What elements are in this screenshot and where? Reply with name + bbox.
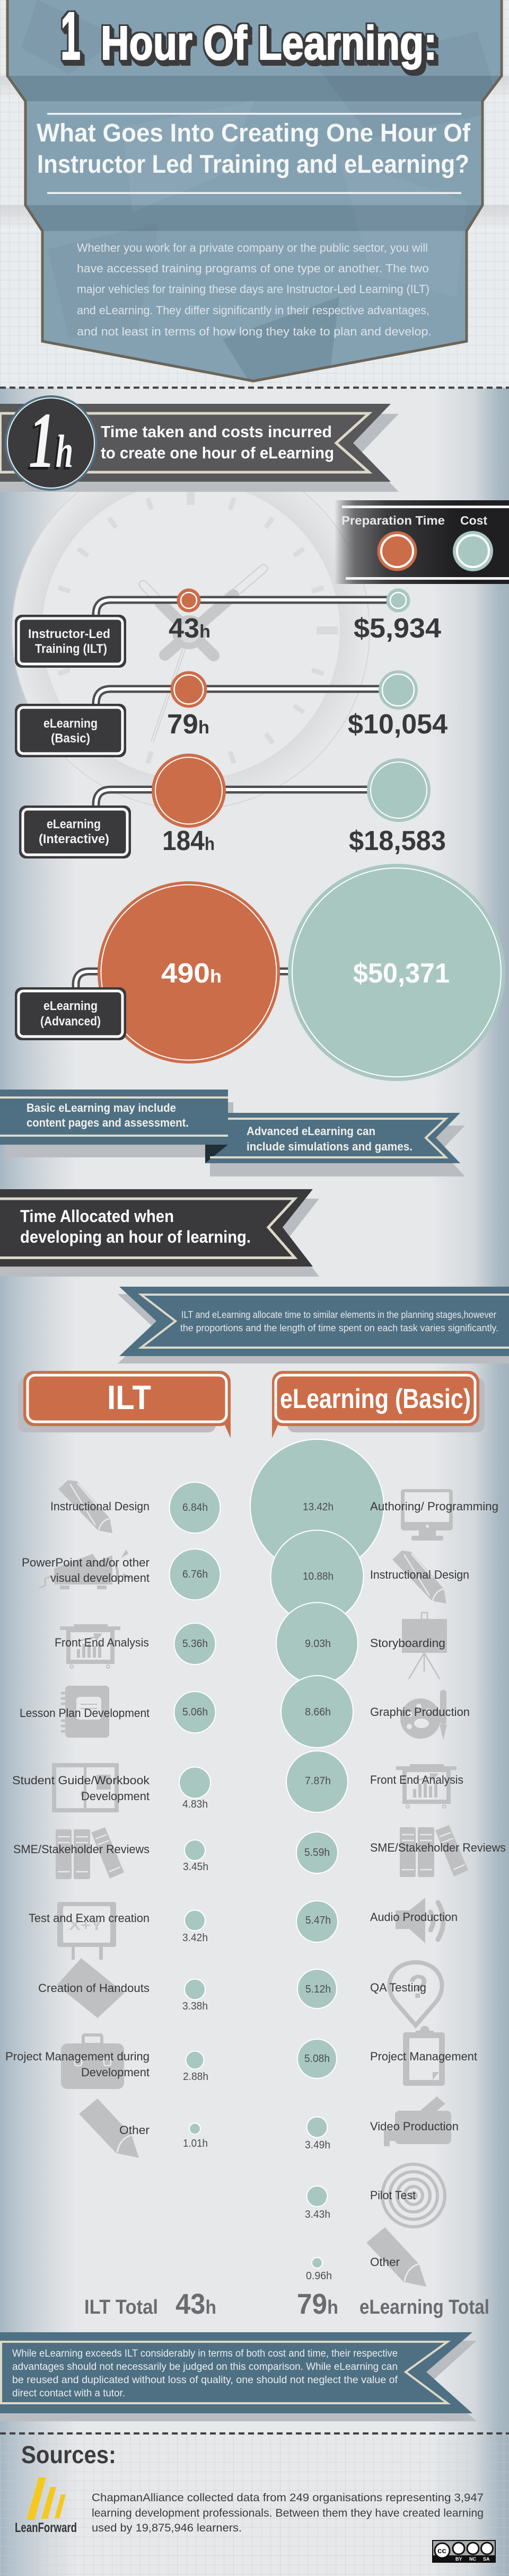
icon: notebook (62, 1686, 109, 1738)
intro paragraph: and eLearning. They differ significantly in their respective advantages, (77, 304, 429, 317)
ILT task labels: Instructional Design (50, 1500, 150, 1513)
callout: allocation note: the proportions and the length of time spent on each task varies significantly. (180, 1323, 498, 1333)
ILT task labels: Student Guide/Workbook (12, 1774, 150, 1787)
badge: creative commons: BY (455, 2556, 462, 2562)
ILT hour values: 2.88h (183, 2071, 208, 2083)
icon: briefcase (61, 2035, 124, 2089)
icon: monitor (401, 1489, 453, 1541)
row: eLearning Advanced (15, 864, 505, 1081)
logo: LeanForward (15, 2477, 77, 2535)
totals: 79h (297, 2288, 338, 2320)
eLearning task labels: QA Testing (370, 1981, 426, 1994)
callout: conclusion: be reused and duplicated without loss of quality, one should not neglect the value of (12, 2375, 398, 2386)
logo: LeanForward: LeanForward (15, 2520, 77, 2535)
badge: creative commons: SA (483, 2556, 490, 2562)
ILT task labels: Creation of Handouts (38, 1981, 150, 1995)
eLearning hour values: 0.96h (306, 2270, 332, 2282)
ILT hour values: 5.36h (182, 1638, 208, 1650)
icon: pen (392, 1551, 446, 1604)
icon: pencil (79, 2099, 139, 2158)
row: eLearning Advanced: 490h (161, 958, 222, 989)
row: eLearning Interactive: 184h (162, 826, 215, 856)
eLearning hour values: 7.87h (305, 1775, 331, 1787)
totals: 43h (175, 2288, 216, 2320)
section ribbon: time and costs: Time taken and costs incurred (101, 422, 332, 441)
callout: conclusion (0, 2332, 477, 2421)
ILT hour values: 3.45h (183, 1861, 208, 1873)
ILT task labels: visual development (50, 1571, 150, 1584)
eLearning hour values: 5.47h (305, 1915, 331, 1926)
ILT task labels: PowerPoint and/or other (22, 1556, 150, 1569)
row: Instructor-Led Training: Instructor-Led (28, 627, 110, 641)
icon: clipboard (403, 2026, 445, 2086)
row: eLearning Advanced: eLearning (43, 999, 98, 1013)
eLearning hour values: 5.12h (305, 1984, 331, 1995)
badge: creative commons: NC (469, 2556, 476, 2562)
section ribbon: time and costs: to create one hour of eLearning (101, 444, 334, 462)
eLearning bubbles (250, 1439, 384, 2268)
ILT task labels: Development (81, 2066, 150, 2079)
ILT task labels: Development (81, 1790, 150, 1803)
icon: chart board (396, 1764, 457, 1808)
totals: eLearning Total (359, 2296, 489, 2318)
ILT task labels (5, 1500, 150, 2137)
eLearning task labels: Audio Production (370, 1910, 458, 1924)
heading: sources: Sources: (21, 2441, 116, 2468)
eLearning task labels: Project Management (370, 2050, 477, 2063)
ILT hour values: 5.06h (182, 1706, 208, 1718)
ILT hour values: 3.42h (182, 1932, 208, 1944)
eLearning task labels: Instructional Design (370, 1568, 469, 1581)
heading: time allocated (0, 1189, 319, 1277)
sources text: learning development professionals. Between them they have created learning (92, 2507, 484, 2519)
ILT task labels: Other (119, 2123, 150, 2137)
eLearning hour values: 13.42h (303, 1501, 334, 1513)
heading: eLearning Basic: eLearning (Basic) (280, 1384, 471, 1414)
totals: ILT Total (84, 2296, 158, 2318)
intro paragraph: major vehicles for training these days are Instructor-Led Learning (ILT) (77, 282, 429, 296)
eLearning task labels: SME/Stakeholder Reviews (370, 1841, 506, 1854)
ILT task labels: Lesson Plan Development (20, 1706, 150, 1720)
icon: easel (402, 1613, 447, 1679)
clock illustration (12, 452, 370, 809)
badge: 1h: 1h (29, 396, 73, 484)
callout: conclusion: While eLearning exceeds ILT considerably in terms of both cost and time, their respective (12, 2348, 398, 2359)
callout: basic eLearning: content pages and assessment. (27, 1116, 189, 1129)
subtitle (37, 113, 471, 194)
row: eLearning Interactive: eLearning (47, 817, 101, 831)
row: Instructor-Led Training: Training (ILT) (35, 642, 107, 656)
title: Hour Of Learning: (101, 17, 437, 70)
icon: open book (54, 1765, 117, 1810)
badge: 1h (5, 395, 97, 491)
icon: handout diamond (57, 1958, 124, 2018)
eLearning hour values: 9.03h (305, 1638, 331, 1650)
row: Instructor-Led Training (15, 588, 441, 668)
icon: chalkboard (57, 1902, 116, 1960)
eLearning hour values: 5.59h (304, 1847, 330, 1858)
eLearning task labels: Pilot Test (370, 2189, 416, 2202)
ILT hour values: 6.84h (182, 1502, 208, 1513)
panel: header banner (0, 0, 509, 382)
callout: advanced eLearning (205, 1113, 465, 1176)
heading: ILT (18, 1371, 231, 1438)
ILT task labels: Test and Exam creation (29, 1911, 150, 1925)
eLearning hour values: 8.66h (305, 1706, 331, 1718)
callout: conclusion: advantages should not necessarily be judged on this comparison. While eLearning can (12, 2361, 398, 2373)
row: eLearning Interactive (19, 754, 446, 858)
eLearning hour values: 3.43h (305, 2209, 330, 2220)
heading: time allocated: Time Allocated when (20, 1207, 174, 1226)
row: eLearning Interactive: $18,583 (349, 826, 446, 856)
intro paragraph: have accessed training programs of one type or another. The two (77, 262, 429, 275)
icon: target (382, 2164, 445, 2227)
row: eLearning Basic: $10,054 (348, 709, 447, 740)
eLearning task labels: Storyboarding (370, 1636, 445, 1650)
icon: video camera (384, 2096, 451, 2146)
callout: allocation note (118, 1287, 509, 1364)
icon: pencil (366, 2227, 426, 2287)
ILT hour values: 4.83h (182, 1799, 208, 1810)
row: eLearning Advanced: $50,371 (353, 958, 450, 989)
eLearning hour values: 3.49h (305, 2139, 330, 2151)
ILT task labels: Front End Analysis (55, 1636, 149, 1649)
icon: books (56, 1827, 124, 1879)
icon: pen (58, 1480, 112, 1533)
row: eLearning Basic: (Basic) (51, 731, 90, 746)
sources text (92, 2492, 484, 2534)
intro paragraph: and not least in terms of how long they take to plan and develop. (77, 325, 432, 338)
row: Instructor-Led Training: $5,934 (354, 613, 441, 644)
callout: basic eLearning (0, 1090, 233, 1157)
eLearning task labels: Authoring/ Programming (370, 1500, 498, 1513)
legend (335, 500, 509, 584)
totals (84, 2288, 489, 2320)
title: 1 (60, 0, 81, 74)
heading: time allocated: developing an hour of learning. (20, 1227, 251, 1246)
sources text: used by 19,875,946 learners. (92, 2522, 242, 2534)
ILT hour values: 1.01h (183, 2138, 208, 2149)
ILT hour values: 6.76h (182, 1569, 208, 1580)
row: eLearning Basic (15, 670, 447, 757)
eLearning task labels (370, 1500, 506, 2269)
section ribbon: time and costs (0, 404, 399, 492)
eLearning task labels: Front End Analysis (370, 1773, 463, 1786)
eLearning task labels: Video Production (370, 2120, 459, 2133)
icon: projector (39, 1550, 134, 1589)
legend: Cost (460, 514, 487, 527)
ILT bubbles (170, 1482, 221, 2135)
intro paragraph (77, 241, 432, 338)
legend: Preparation Time (341, 514, 445, 527)
row: eLearning Basic: 79h (167, 709, 209, 740)
icon: chart board (60, 1624, 120, 1668)
ILT task labels: Project Management during (5, 2050, 150, 2063)
icon: question pin: ? (408, 1969, 428, 2005)
eLearning task labels: Graphic Production (370, 1705, 470, 1719)
sources text: ChapmanAlliance collected data from 249 organisations representing 3,947 (92, 2492, 484, 2504)
ILT task labels: SME/Stakeholder Reviews (13, 1843, 150, 1856)
row: eLearning Interactive: (Interactive) (39, 832, 109, 846)
eLearning hour values (303, 1501, 334, 2282)
badge: creative commons (433, 2540, 495, 2562)
subtitle: What Goes Into Creating One Hour Of (37, 119, 471, 147)
ILT hour values: 3.38h (182, 2000, 208, 2012)
row: eLearning Advanced: (Advanced) (40, 1014, 101, 1029)
badge: creative commons: cc (437, 2546, 446, 2555)
icon: palette (400, 1690, 447, 1740)
callout: basic eLearning: Basic eLearning may include (27, 1101, 176, 1114)
row: Instructor-Led Training: 43h (169, 613, 210, 644)
eLearning hour values: 10.88h (303, 1571, 334, 1582)
icon: question pin (389, 1962, 442, 2025)
heading: eLearning Basic (272, 1371, 485, 1438)
row: eLearning Basic: eLearning (43, 716, 98, 731)
icon: speaker (396, 1898, 443, 1943)
callout: advanced eLearning: Advanced eLearning can (247, 1125, 375, 1138)
icon: chalkboard: X+Y (69, 1917, 102, 1933)
eLearning task labels: Other (370, 2255, 400, 2269)
intro paragraph: Whether you work for a private company or the public sector, you will (77, 241, 428, 254)
heading: ILT: ILT (107, 1378, 151, 1417)
eLearning hour values: 5.08h (304, 2053, 330, 2065)
icon: books (400, 1825, 468, 1877)
title (60, 0, 437, 74)
callout: advanced eLearning: include simulations and games. (247, 1140, 413, 1153)
callout: conclusion: direct contact with a tutor. (12, 2388, 125, 2399)
subtitle: Instructor Led Training and eLearning? (37, 151, 469, 179)
ILT hour values (182, 1502, 208, 2149)
